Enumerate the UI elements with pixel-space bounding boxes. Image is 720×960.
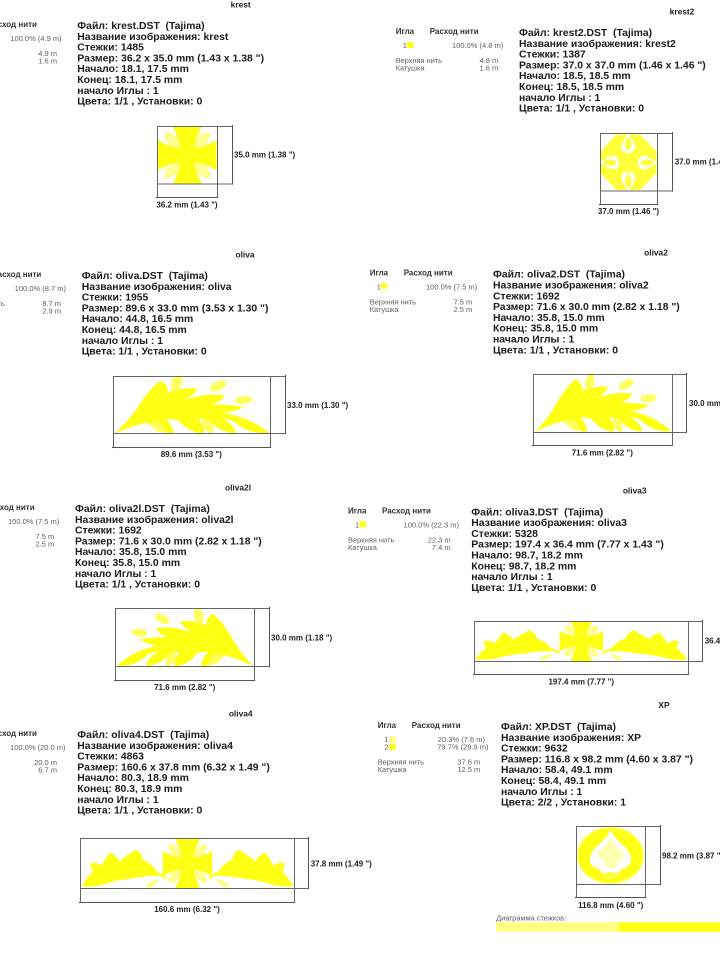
- thread table: XP: 79.7% (29.9 m): [437, 743, 489, 752]
- panel: oliva3: [348, 486, 720, 686]
- thread table: oliva2l: 100.0% (7.5 m): [8, 517, 60, 526]
- file info: oliva2: Размер: 71.6 x 30.0 mm (2.82 x 1.18 "): [493, 302, 680, 313]
- dimension labels: oliva4: [154, 860, 372, 914]
- title: oliva: oliva: [235, 249, 255, 259]
- dimension labels: krest2: 37.0 mm (1.46 "): [598, 207, 659, 216]
- file info: oliva2l: Цвета: 1/1 , Установки: 0: [75, 580, 200, 591]
- file info: krest2: Начало: 18.5, 18.5 mm: [519, 71, 631, 82]
- file info: krest: Файл: krest.DST (Tajima): [77, 21, 205, 32]
- embroidery preview: XP wreath: [576, 826, 660, 898]
- file info: oliva4: Файл: oliva4.DST (Tajima): [77, 730, 209, 741]
- file info: oliva2l: Конец: 35.8, 15.0 mm: [75, 558, 180, 569]
- thread table: krest2: Игла: [396, 27, 415, 36]
- thread table: oliva2l: 7.5 m: [36, 532, 54, 541]
- file info: oliva3: Конец: 98.7, 18.2 mm: [471, 561, 576, 572]
- panel: XP: [378, 700, 720, 932]
- file info: oliva: Название изображения: oliva: [82, 281, 232, 293]
- file info: oliva: Начало: 44.8, 16.5 mm: [82, 314, 193, 325]
- stitch diagram: [496, 914, 720, 932]
- file info: krest: Стежки: 1485: [77, 43, 144, 54]
- file info: oliva2l: Название изображения: oliva2l: [75, 514, 234, 526]
- file info: oliva4: Название изображения: oliva4: [77, 740, 233, 752]
- embroidery preview: oliva4 cross and sprigs: [80, 838, 308, 902]
- embroidery preview: krest2 ornament: [600, 134, 672, 204]
- thread table: oliva4: 100.0% (20.0 m): [10, 743, 66, 752]
- panel: oliva2l: [0, 482, 332, 692]
- file info: oliva3: Цвета: 1/1 , Установки: 0: [471, 583, 597, 594]
- file info: oliva4: Конец: 80.3, 18.9 mm: [77, 784, 182, 795]
- file info: XP: Размер: 116.8 x 98.2 mm (4.60 x 3.87 "): [501, 754, 693, 765]
- thread table: oliva: 8.7 m: [42, 299, 61, 308]
- thread table: oliva2: Расход нити: [404, 269, 453, 278]
- dimension labels: oliva2: [572, 399, 720, 457]
- dimension labels: oliva3: [548, 637, 720, 686]
- embroidery preview: oliva3 cross and sprigs: [474, 621, 702, 674]
- thread table: oliva3: Игла: [348, 506, 367, 515]
- thread table: oliva2: Верхняя нить: [370, 298, 416, 307]
- panel: oliva4: [0, 708, 372, 914]
- thread table: oliva2: Катушка: [370, 305, 399, 314]
- embroidery preview: oliva sprig: [114, 374, 286, 448]
- dimension labels: oliva2l: 71.6 mm (2.82 "): [154, 683, 216, 692]
- dimension labels: krest: 36.2 mm (1.43 "): [156, 200, 218, 209]
- file info: oliva3: начало Иглы : 1: [471, 572, 553, 583]
- file info: oliva2l: Стежки: 1692: [75, 526, 142, 537]
- dimension labels: oliva: 89.6 mm (3.53 "): [161, 450, 222, 459]
- panel: oliva: [0, 249, 348, 459]
- dimension labels: XP: [578, 851, 720, 910]
- file info: oliva2: Стежки: 1692: [493, 291, 560, 302]
- thread table: krest2: 100.0% (4.8 m): [452, 41, 504, 50]
- thread table: XP: Катушка: [378, 765, 407, 774]
- thread table: XP: Верхняя нить: [378, 758, 424, 767]
- file info: krest: Название изображения: krest: [77, 31, 229, 43]
- dimension labels: oliva2l: 30.0 mm (1.18 "): [271, 633, 332, 642]
- thread table: oliva: 2.9 m: [42, 306, 61, 316]
- thread table: oliva3: [348, 506, 459, 552]
- thread table: oliva2l: [0, 503, 60, 548]
- panel: krest2: [396, 6, 720, 216]
- dimension labels: krest: 35.0 mm (1.38 "): [234, 151, 295, 160]
- file info: oliva4: Стежки: 4863: [77, 752, 144, 763]
- file info: oliva2: Файл: oliva2.DST (Tajima): [493, 270, 625, 281]
- thread table: oliva2: 2.5 m: [454, 305, 472, 314]
- thread table: oliva3: 7.4 m: [432, 543, 451, 552]
- title: XP: XP: [658, 700, 670, 710]
- file info: krest2: Цвета: 1/1 , Установки: 0: [519, 104, 644, 115]
- file info: XP: Название изображения: XP: [501, 732, 641, 744]
- thread table: oliva: 100.0% (8.7 m): [15, 284, 66, 293]
- title: oliva2: oliva2: [644, 248, 668, 258]
- dimension labels: oliva2l: [154, 633, 332, 692]
- dimension labels: oliva: 33.0 mm (1.30 "): [287, 401, 348, 410]
- thread table: XP: [378, 721, 489, 774]
- file info: oliva: начало Иглы : 1: [82, 336, 163, 347]
- file info: oliva: Конец: 44.8, 16.5 mm: [82, 325, 187, 336]
- file info: XP: Конец: 58.4, 49.1 mm: [501, 776, 606, 787]
- title: oliva2l: oliva2l: [225, 482, 251, 492]
- file info: krest: начало Иглы : 1: [77, 86, 159, 97]
- dimension labels: krest2: [598, 158, 720, 216]
- file info: oliva3: Файл: oliva3.DST (Tajima): [471, 507, 603, 518]
- file info: krest2: начало Иглы : 1: [519, 93, 601, 104]
- thread table: krest2: Верхняя нить: [396, 56, 442, 65]
- file info: krest: Цвета: 1/1 , Установки: 0: [77, 97, 203, 108]
- file info: oliva4: начало Иглы : 1: [77, 795, 159, 806]
- thread table: oliva4: 6.7 m: [38, 766, 57, 774]
- file info: oliva: Цвета: 1/1 , Установки: 0: [82, 347, 207, 358]
- file info: oliva4: Цвета: 1/1 , Установки: 0: [77, 806, 203, 817]
- file info: oliva4: Размер: 160.6 x 37.8 mm (6.32 x 1.49 "): [77, 762, 270, 773]
- file info: oliva3: Начало: 98.7, 18.2 mm: [471, 550, 583, 562]
- title: oliva3: oliva3: [623, 486, 647, 496]
- thread table: oliva3: Катушка: [348, 543, 378, 552]
- file info: XP: начало Иглы : 1: [501, 787, 583, 798]
- thread table: krest2: Расход нити: [430, 27, 479, 36]
- thread table: krest2: Катушка: [396, 64, 425, 72]
- embroidery preview: oliva2l sprig: [116, 607, 270, 680]
- thread table: krest2: [396, 27, 504, 72]
- file info: oliva2l: Размер: 71.6 x 30.0 mm (2.82 x 1.18 "): [75, 536, 262, 547]
- dimension labels: oliva: [161, 401, 348, 459]
- dimension labels: oliva2: 71.6 mm (2.82 "): [572, 448, 633, 457]
- thread table: XP: 2: [384, 743, 389, 752]
- thread table: oliva: [0, 270, 66, 316]
- thread table: oliva3: 1: [355, 520, 359, 529]
- file info: XP: Начало: 58.4, 49.1 mm: [501, 765, 613, 776]
- file info: oliva2: начало Иглы : 1: [493, 334, 575, 346]
- thread table: oliva4: [0, 729, 66, 774]
- thread table: XP: 20.3% (7.6 m): [438, 735, 485, 744]
- thread table: oliva2: [370, 269, 478, 314]
- thread table: krest: [0, 20, 62, 66]
- thread table: oliva3: Расход нити: [382, 506, 431, 515]
- panel: krest: [0, 0, 295, 209]
- file info: oliva4: Начало: 80.3, 18.9 mm: [77, 773, 189, 784]
- file info: oliva2: Название изображения: oliva2: [493, 280, 649, 292]
- file info: krest2: Размер: 37.0 x 37.0 mm (1.46 x 1.46 "): [519, 60, 706, 71]
- thread table: krest: 4.9 m: [38, 49, 57, 58]
- thread table: oliva4: 20.0 m: [34, 758, 57, 767]
- thread table: krest2: 4.8 m: [480, 56, 498, 65]
- embroidery preview: krest cross: [158, 126, 232, 198]
- file info: oliva2l: начало Иглы : 1: [75, 569, 157, 580]
- stitch diagram: Диаграмма стежков:: [496, 914, 566, 922]
- file info: XP: Цвета: 2/2 , Установки: 1: [501, 798, 626, 809]
- title: krest2: krest2: [670, 6, 695, 16]
- file info: krest: Размер: 36.2 x 35.0 mm (1.43 x 1.38 "): [77, 53, 264, 64]
- file info: oliva2: Конец: 35.8, 15.0 mm: [493, 324, 598, 335]
- file info: oliva2: Цвета: 1/1 , Установки: 0: [493, 345, 618, 356]
- thread table: XP: Расход нити: [412, 721, 461, 730]
- file info: oliva3: Размер: 197.4 x 36.4 mm (7.77 x 1.43 "): [471, 540, 664, 551]
- file info: oliva3: Название изображения: oliva3: [471, 517, 627, 529]
- file info: XP: Стежки: 9632: [501, 744, 568, 755]
- thread table: oliva3: Верхняя нить: [348, 535, 394, 544]
- dimension labels: oliva4: 160.6 mm (6.32 "): [154, 905, 220, 914]
- dimension labels: oliva4: 37.8 mm (1.49 "): [311, 860, 372, 869]
- dimension labels: oliva3: 197.4 mm (7.77 "): [548, 677, 614, 686]
- thread table: XP: 37.6 m: [457, 758, 480, 767]
- thread table: XP: Игла: [378, 721, 397, 730]
- file info: oliva2l: Файл: oliva2l.DST (Tajima): [75, 504, 210, 515]
- title: oliva4: oliva4: [229, 708, 253, 718]
- embroidery preview: oliva2 sprig: [534, 373, 686, 446]
- file info: XP: Файл: XP.DST (Tajima): [501, 722, 616, 733]
- thread table: krest2: 1: [403, 41, 407, 50]
- file info: oliva2: Начало: 35.8, 15.0 mm: [493, 313, 605, 324]
- file info: krest2: Стежки: 1387: [519, 50, 586, 61]
- file info: oliva3: Стежки: 5328: [471, 529, 538, 540]
- file info: oliva2l: Начало: 35.8, 15.0 mm: [75, 547, 187, 558]
- file info: oliva: Стежки: 1955: [82, 293, 149, 304]
- file info: krest: Начало: 18.1, 17.5 mm: [77, 64, 189, 75]
- thread table: oliva3: 22.3 m: [428, 535, 451, 544]
- thread table: oliva2: 7.5 m: [454, 298, 472, 307]
- thread table: oliva3: 100.0% (22.3 m): [404, 520, 459, 529]
- thread table: krest: 1.6 m: [38, 56, 57, 66]
- thread table: XP: 12.5 m: [457, 765, 480, 774]
- thread table: XP: 1: [384, 735, 389, 744]
- panel: oliva2: [370, 248, 720, 457]
- thread table: oliva2: 100.0% (7.5 m): [426, 283, 478, 292]
- thread table: krest: 100.0% (4.9 m): [10, 34, 62, 43]
- thread table: oliva2l: 2.5 m: [36, 540, 54, 548]
- file info: oliva: Размер: 89.6 x 33.0 mm (3.53 x 1.30 "): [82, 303, 268, 314]
- file info: krest: Конец: 18.1, 17.5 mm: [77, 75, 182, 86]
- dimension labels: XP: 116.8 mm (4.60 "): [578, 901, 644, 910]
- file info: krest2: Конец: 18.5, 18.5 mm: [519, 82, 624, 93]
- file info: krest2: Название изображения: krest2: [519, 38, 676, 50]
- thread table: oliva2: 1: [377, 283, 381, 292]
- file info: oliva: Файл: oliva.DST (Tajima): [82, 271, 208, 282]
- thread table: krest2: 1.6 m: [480, 64, 498, 72]
- dimension labels: krest: [156, 151, 295, 209]
- file info: krest2: Файл: krest2.DST (Tajima): [519, 28, 652, 39]
- thread table: oliva2: Игла: [370, 269, 389, 278]
